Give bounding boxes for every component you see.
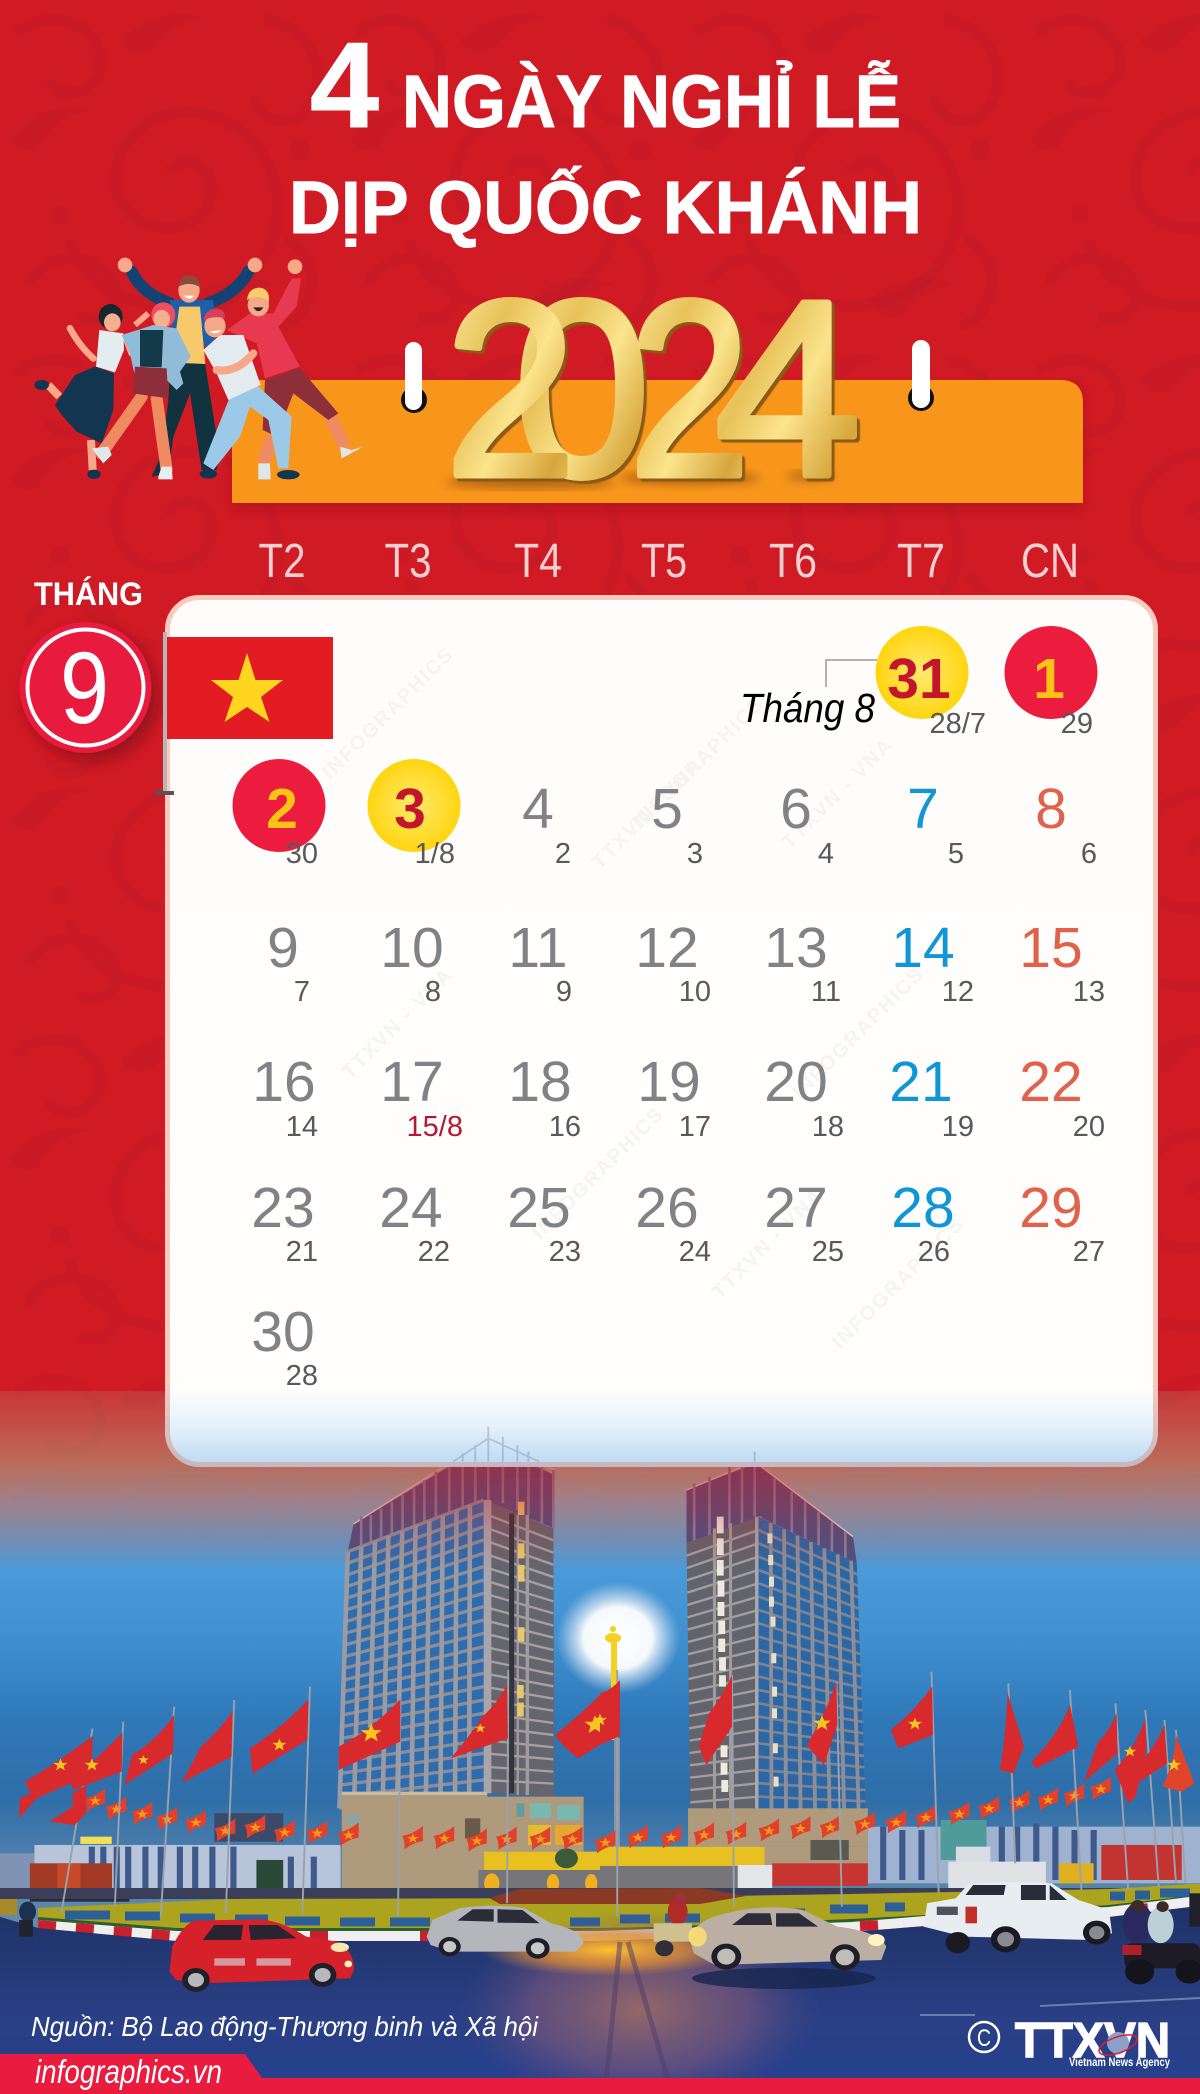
weekday headers: CN	[1021, 535, 1079, 588]
right pin	[908, 340, 934, 411]
big flags and vehicles right	[593, 1670, 1200, 1989]
faint watermarks	[318, 643, 969, 1354]
right tower window face	[758, 1517, 866, 1815]
weekday headers: T3	[384, 535, 432, 588]
week 3: 17	[679, 1111, 711, 1143]
blue sign boards	[65, 1893, 1190, 1922]
weekday headers: T4	[514, 535, 562, 588]
week 3: 18	[812, 1111, 844, 1143]
distant city blocks right	[868, 1820, 1200, 1883]
week 1: 5	[948, 838, 964, 870]
red and white kerb	[38, 1902, 1190, 1936]
week 4: 27	[1073, 1236, 1105, 1268]
copyright symbol	[969, 2022, 999, 2052]
week 1: 6	[1081, 838, 1097, 870]
week 3: 19	[637, 1050, 701, 1114]
orange year band	[232, 380, 1083, 510]
copyright symbol: C	[977, 2025, 991, 2052]
red flower bed	[489, 1888, 746, 1904]
numerals: 2	[629, 249, 750, 528]
holiday circle 31	[876, 626, 986, 740]
weekday headers: T2	[258, 535, 306, 588]
faint watermarks: TTXVN - VNA	[708, 1184, 828, 1304]
title	[289, 17, 922, 249]
man with cap, tee and jeans	[200, 309, 300, 479]
month label: THÁNG	[34, 576, 143, 612]
week 5: 28	[286, 1360, 318, 1392]
row of small flags right	[595, 1777, 1111, 1853]
week 2: 15	[1019, 916, 1083, 980]
calendar pins	[401, 340, 934, 413]
faint watermarks: TTXVN - VNA	[338, 964, 458, 1084]
dark street strip	[0, 1888, 1200, 1899]
footer tab	[0, 2054, 262, 2094]
numerals: 0	[514, 249, 650, 528]
week 3: 16	[549, 1111, 581, 1143]
gold sedan	[688, 1907, 886, 1970]
flag poles right	[617, 1670, 1186, 1917]
weekday headers	[258, 535, 1079, 588]
numerals	[445, 249, 861, 528]
week 1: 3	[687, 838, 703, 870]
faint watermarks: TTXVN - VNA	[588, 754, 708, 874]
week 3: 14	[286, 1111, 318, 1143]
week 2: 11	[508, 916, 568, 980]
week 4: 25	[812, 1236, 844, 1268]
blond man in red hoodie	[227, 259, 363, 479]
weekday headers: T5	[641, 535, 687, 588]
website label: infographics.vn	[35, 2053, 222, 2090]
week 5	[251, 1300, 318, 1392]
logo globe	[1107, 2032, 1129, 2054]
holiday circle 3: 3	[394, 777, 426, 841]
title line 1: 4	[310, 17, 379, 153]
flag cloth	[167, 637, 333, 739]
left and right towers	[339, 1427, 866, 1815]
flag poles	[61, 1670, 508, 1917]
right tower panel face	[687, 1517, 758, 1815]
motorbike with two riders right	[1122, 1893, 1200, 1984]
agency name: Vietnam News Agency	[1069, 2055, 1170, 2069]
week 1	[522, 777, 1097, 870]
numerals: 4	[715, 249, 861, 528]
august label: Tháng 8	[740, 685, 875, 731]
week 4: 22	[418, 1236, 450, 1268]
week 2: 13	[1073, 976, 1105, 1008]
orange light patch	[480, 1924, 740, 1976]
week 2	[267, 916, 1105, 1008]
week 2: 11	[811, 976, 841, 1008]
gold 2024 numerals	[445, 249, 861, 528]
faint tower tips seen through card	[453, 1427, 755, 1462]
faint watermarks: INFOGRAPHICS	[528, 1103, 669, 1244]
weekday headers: T7	[897, 535, 945, 588]
week 4: 24	[379, 1176, 443, 1240]
weekday headers: T6	[769, 535, 817, 588]
motorbike rider left	[19, 1902, 36, 1937]
title line 1	[310, 17, 901, 153]
week 4: 23	[549, 1236, 581, 1268]
week 2: 12	[635, 916, 699, 980]
flag star	[211, 653, 283, 722]
logo swoosh	[1096, 2031, 1140, 2059]
week 3: 21	[889, 1050, 953, 1114]
week 1: 8	[1035, 777, 1067, 841]
holiday circle 31: 28/7	[930, 708, 986, 740]
flag pole	[163, 632, 167, 793]
holiday circle 3	[368, 759, 460, 870]
week 2: 14	[891, 916, 955, 980]
distant city blocks left	[0, 1813, 341, 1895]
red hatchback car	[170, 1919, 354, 1992]
month number: 9	[60, 631, 109, 745]
red patterned background	[0, 278, 1200, 1560]
week 4: 24	[679, 1236, 711, 1268]
illustration: group of five cheering friends	[34, 258, 363, 479]
holiday circle 2: 2	[266, 777, 298, 841]
badge disc	[20, 622, 152, 753]
title line 2: DỊP QUỐC KHÁNH	[289, 166, 922, 249]
right tower podium	[600, 1808, 868, 1889]
faint watermarks: INFOGRAPHICS	[628, 693, 769, 834]
TTXVN logo: TTXVN	[1015, 2014, 1170, 2068]
week 4: 26	[918, 1236, 950, 1268]
month badge	[20, 576, 158, 761]
white pickup truck	[923, 1882, 1112, 1953]
week 2: 10	[679, 976, 711, 1008]
woman with pink hair and denim jacket	[92, 302, 191, 479]
right tower crown	[687, 1452, 857, 1563]
road lane marks	[920, 1998, 1200, 2015]
numerals: 2	[445, 249, 576, 528]
holiday circle 3: 1/8	[415, 838, 455, 870]
source note: Nguồn: Bộ Lao động-Thương binh và Xã hội	[31, 2011, 539, 2042]
holiday circle 2: 30	[286, 838, 318, 870]
road	[0, 1907, 1200, 2094]
warm road glow	[460, 1910, 820, 2094]
week 2: 9	[267, 916, 299, 980]
footer bar	[0, 2053, 1200, 2094]
right half scene: buildings, small flags	[595, 1777, 1200, 1893]
week 1: 7	[907, 777, 939, 841]
week 4: 26	[635, 1176, 699, 1240]
green hedge	[38, 1899, 1190, 1931]
holiday circle 1: 29	[1061, 708, 1093, 740]
august label	[740, 660, 877, 731]
big flags and poles left	[19, 1670, 606, 1992]
title line 1: NGÀY NGHỈ LỄ	[402, 60, 901, 143]
week 4: 27	[764, 1176, 828, 1240]
week 3: 20	[1073, 1111, 1105, 1143]
week 3: 20	[764, 1050, 828, 1114]
week 1: 6	[780, 777, 812, 841]
moon glow behind mast	[556, 1582, 680, 1694]
week 3: 19	[942, 1111, 974, 1143]
photo: city skyline with towers and flags	[0, 1391, 1200, 2094]
grass roundabout	[38, 1884, 1200, 1934]
week 5: 30	[251, 1300, 315, 1364]
left tower window face	[339, 1500, 484, 1808]
badge ring	[28, 630, 144, 746]
sky	[0, 1391, 1200, 1951]
week 4: 25	[507, 1176, 571, 1240]
silver sedan	[427, 1906, 584, 1959]
week 3: 22	[1019, 1050, 1083, 1114]
week 3	[252, 1050, 1105, 1143]
faint watermarks: TTXVN - VNA	[778, 734, 898, 854]
holiday circle 31: 31	[887, 647, 951, 711]
week 1: 4	[522, 777, 554, 841]
calendar dates	[232, 626, 1105, 1392]
numeral shadows	[445, 472, 834, 488]
faint watermarks: INFOGRAPHICS	[318, 643, 459, 784]
road shadow lines	[605, 1942, 672, 2094]
left tower crown	[348, 1427, 554, 1552]
big flags right	[593, 1675, 1194, 1803]
holiday circle 1	[1004, 626, 1098, 740]
week 4: 23	[251, 1176, 315, 1240]
week 3: 16	[252, 1050, 316, 1114]
vietnam flag	[155, 632, 333, 795]
left tower panel face	[484, 1500, 554, 1797]
week 3: 18	[508, 1050, 572, 1114]
week 2: 10	[380, 916, 444, 980]
left half scene: buildings, flags	[0, 1788, 600, 1915]
container truck	[0, 1863, 129, 1915]
week 4	[251, 1176, 1105, 1268]
faint watermarks: INFOGRAPHICS	[828, 1213, 969, 1354]
left tower podium	[342, 1792, 600, 1893]
badge shadow	[26, 629, 158, 761]
week 1: 4	[818, 838, 834, 870]
tall man in blue jacket	[118, 258, 262, 477]
big flags	[19, 1685, 606, 1825]
week 3: 15/8	[407, 1111, 463, 1143]
week 2: 9	[556, 976, 572, 1008]
week 4: 29	[1019, 1176, 1083, 1240]
pole foot	[155, 791, 174, 795]
week 2: 8	[425, 976, 441, 1008]
week 2: 13	[764, 916, 828, 980]
week 3: 17	[380, 1050, 444, 1114]
holiday circle 1: 1	[1033, 647, 1065, 711]
week 1: 2	[555, 838, 571, 870]
faint watermarks: INFOGRAPHICS	[788, 963, 929, 1104]
motorbike behind gold car	[654, 1893, 692, 1956]
row of small flags	[85, 1788, 582, 1852]
week 1: 5	[651, 777, 683, 841]
yellow mast and light	[605, 1626, 621, 1900]
left pin	[401, 342, 427, 413]
week 2: 7	[294, 976, 310, 1008]
holiday circle 2	[232, 759, 326, 870]
containers and trucks	[738, 1845, 1182, 1893]
week 2: 12	[942, 976, 974, 1008]
calendar card	[168, 598, 1156, 1464]
car shadow	[692, 1968, 876, 1989]
woman in skirt	[34, 304, 132, 479]
week 4: 21	[286, 1236, 318, 1268]
week 4: 28	[891, 1176, 955, 1240]
